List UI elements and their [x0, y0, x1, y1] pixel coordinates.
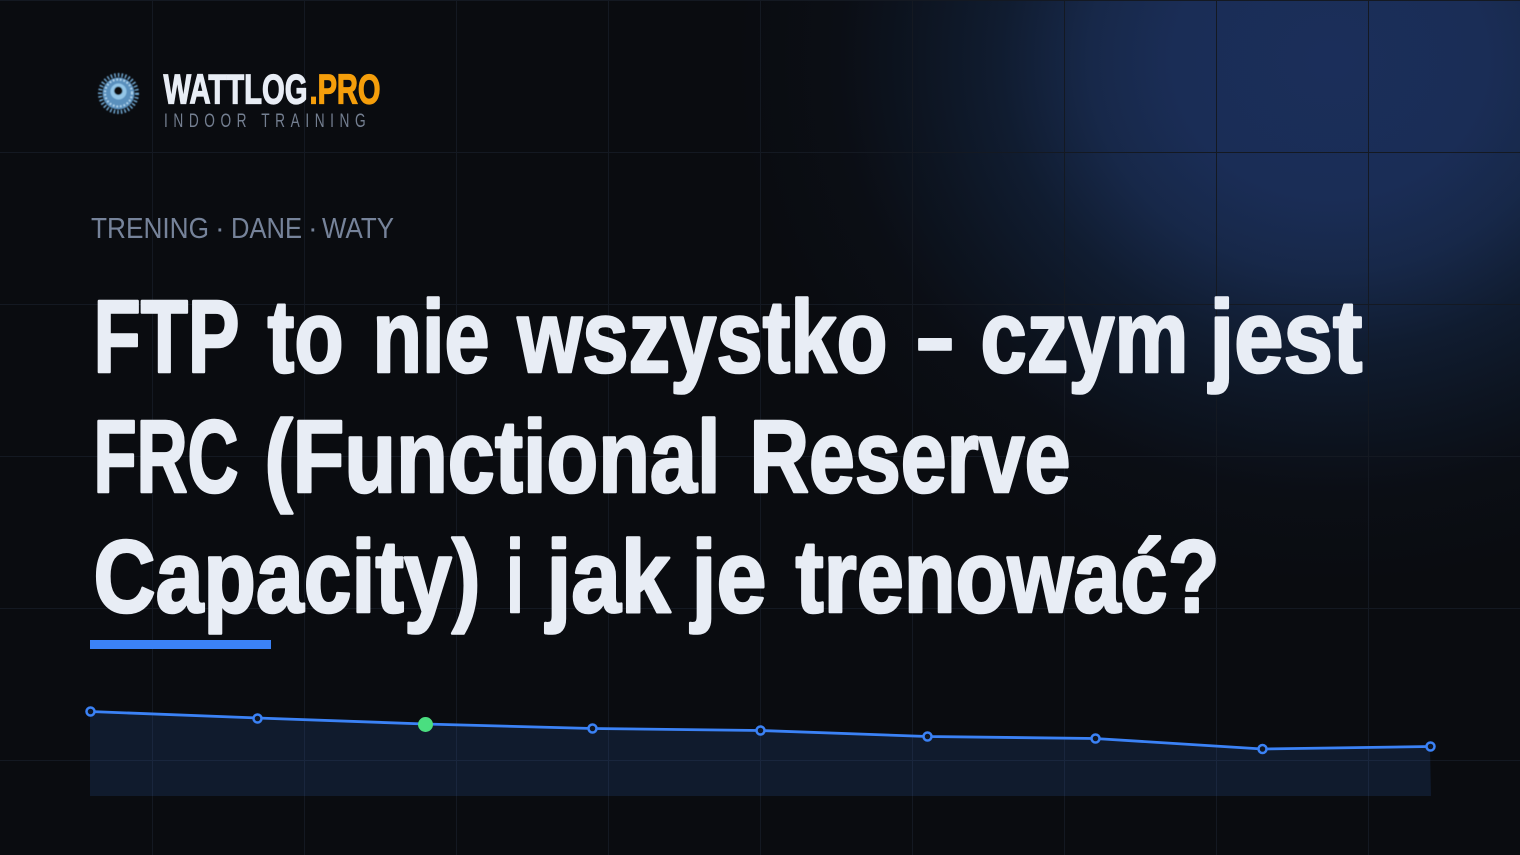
title: i [506, 519, 524, 634]
brand name: WATTLOG [164, 66, 308, 112]
eyebrow: TRENING [91, 213, 209, 245]
title: jest [1208, 279, 1362, 394]
title accent underline [90, 640, 271, 649]
title: Reserve [750, 399, 1070, 514]
title: FTP [94, 279, 240, 394]
eyebrow: WATY [322, 213, 394, 245]
title: FRC [94, 399, 238, 514]
brand tagline: INDOOR TRAINING [164, 110, 366, 132]
title: jak [545, 519, 671, 634]
eyebrow [91, 213, 394, 245]
title: to [268, 279, 344, 394]
title: je [690, 519, 766, 634]
title: trenować? [796, 519, 1220, 634]
line chart: power trend [86, 708, 1434, 796]
title [94, 279, 1362, 634]
eyebrow: · [308, 213, 318, 245]
title: nie [372, 279, 490, 394]
highlighted data point [418, 717, 433, 732]
eyebrow: · [215, 213, 225, 245]
title: czym [980, 279, 1188, 394]
title: wszystko [517, 279, 888, 394]
logo: cassette sprocket icon [100, 75, 137, 112]
title: – [917, 279, 953, 394]
eyebrow: DANE [231, 213, 302, 245]
brand name: .PRO [310, 66, 380, 112]
title: Capacity) [94, 519, 480, 634]
title: (Functional [264, 399, 720, 514]
